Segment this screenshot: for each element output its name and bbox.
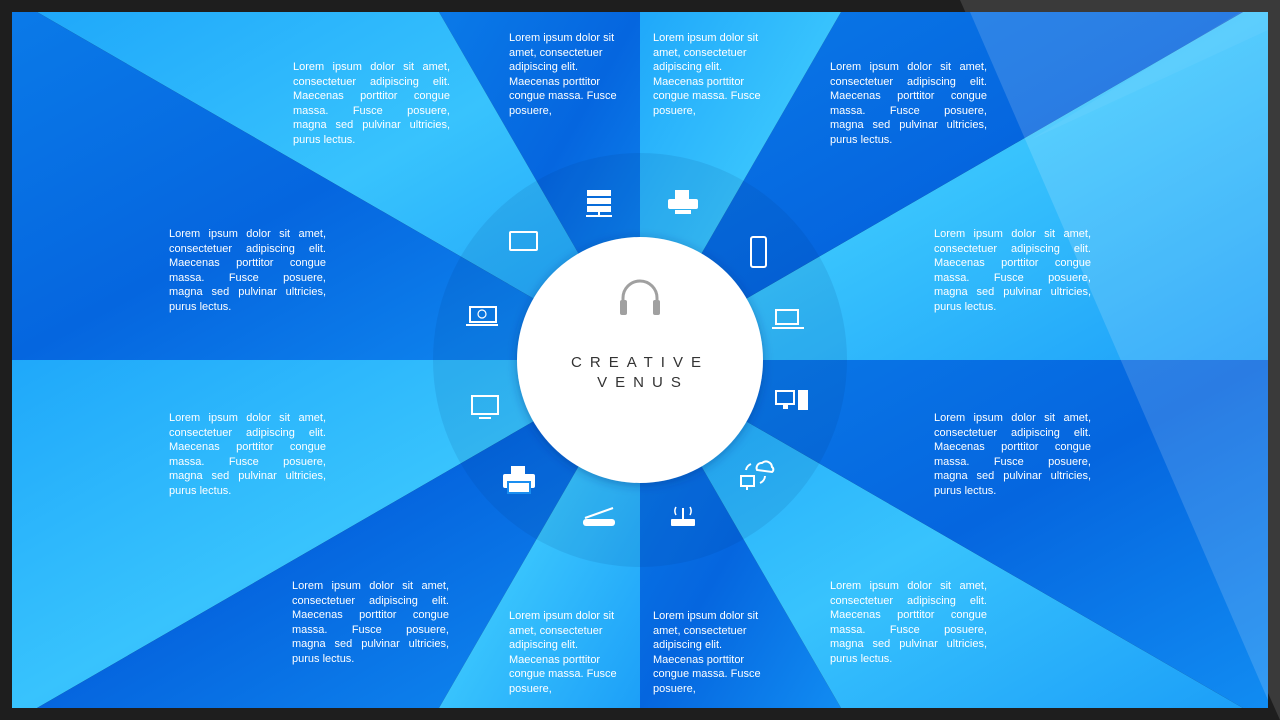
icon: headphones: [620, 281, 660, 315]
text: left lower: purus lectus.: [169, 484, 231, 496]
text: left lower: [169, 412, 326, 496]
text: left upper: consectetuer adipiscing elit.: [169, 242, 326, 254]
icon: phone: [751, 237, 766, 267]
text: right lower: consectetuer adipiscing elit.: [934, 426, 1091, 438]
text: top center-right: [653, 32, 761, 116]
text: bottom-right: Lorem ipsum dolor sit amet,: [830, 580, 987, 592]
text: bottom-left: purus lectus.: [292, 652, 354, 664]
text: left lower: massa. Fusce posuere,: [169, 456, 326, 468]
text: right upper: purus lectus.: [934, 300, 996, 312]
text: bottom-right: Maecenas porttitor congue: [830, 609, 987, 621]
text: bottom-right: [830, 580, 987, 664]
text: bottom center-right: [653, 610, 761, 694]
text: top-left outer: purus lectus.: [293, 134, 355, 146]
text: top-right outer: massa. Fusce posuere,: [830, 104, 987, 116]
text: top-right outer: Lorem ipsum dolor sit amet,: [830, 61, 987, 73]
text: top center-left: Lorem ipsum dolor sit: [509, 32, 614, 44]
text: bottom center-right: congue massa. Fusce: [653, 668, 761, 680]
text: left upper: purus lectus.: [169, 300, 231, 312]
text: bottom-left: massa. Fusce posuere,: [292, 624, 449, 636]
text: right lower: purus lectus.: [934, 484, 996, 496]
icon: laptop globe: [466, 307, 498, 325]
text: top-left outer: [293, 61, 450, 146]
text: top center-right: Lorem ipsum dolor sit: [653, 32, 758, 44]
text: top center-left: Maecenas porttitor: [509, 76, 600, 88]
icon: printer: [503, 466, 535, 493]
text: bottom center-left: amet, consectetuer: [509, 624, 603, 636]
text: top-right outer: purus lectus.: [830, 134, 892, 146]
text: bottom center-left: adipiscing elit.: [509, 639, 578, 651]
text: left lower: Lorem ipsum dolor sit amet,: [169, 412, 326, 424]
text: top-right outer: consectetuer adipiscing elit.: [830, 76, 987, 88]
top-right border corner: [960, 0, 1280, 720]
text: bottom center-right: amet, consectetuer: [653, 624, 747, 636]
icon: router: [671, 507, 695, 526]
text: right lower: massa. Fusce posuere,: [934, 456, 1091, 468]
text: top-left outer: Lorem ipsum dolor sit amet,: [293, 61, 450, 73]
text: top center-right: congue massa. Fusce: [653, 90, 761, 102]
icon: tablet: [510, 232, 537, 250]
icon: cloud sync: [741, 461, 773, 490]
text: bottom-right: magna sed pulvinar ultricies,: [830, 638, 987, 650]
text: top center-right: posuere,: [653, 104, 696, 116]
text: top center-right: adipiscing elit.: [653, 61, 722, 73]
text: right lower: Maecenas porttitor congue: [934, 441, 1091, 453]
text: bottom-left: Maecenas porttitor congue: [292, 609, 449, 621]
text: right lower: magna sed pulvinar ultricies,: [934, 470, 1091, 482]
text: left upper: massa. Fusce posuere,: [169, 272, 326, 284]
title: CREATIVE: [571, 354, 709, 371]
text: bottom-left: Lorem ipsum dolor sit amet,: [292, 580, 449, 592]
icon: desktop: [776, 390, 808, 410]
text: bottom center-left: [509, 610, 617, 694]
text: top-left outer: massa. Fusce posuere,: [293, 104, 450, 116]
text: left upper: Lorem ipsum dolor sit amet,: [169, 228, 326, 240]
text: right upper: Lorem ipsum dolor sit amet,: [934, 228, 1091, 240]
text: right upper: [934, 228, 1091, 312]
ring: [433, 153, 847, 567]
icon: server: [586, 190, 612, 217]
text: left lower: Maecenas porttitor congue: [169, 441, 326, 453]
text: bottom center-left: posuere,: [509, 682, 552, 694]
icon: laptop: [772, 310, 804, 328]
text: right upper: magna sed pulvinar ultricies,: [934, 286, 1091, 298]
icon: shredder: [668, 190, 698, 214]
text: left upper: Maecenas porttitor congue: [169, 257, 326, 269]
text: top center-left: [509, 32, 617, 116]
text: bottom-right: purus lectus.: [830, 652, 892, 664]
icon: monitor: [472, 396, 498, 418]
text: left upper: magna sed pulvinar ultricies,: [169, 286, 326, 298]
text: top center-right: amet, consectetuer: [653, 46, 747, 58]
text: top center-left: amet, consectetuer: [509, 46, 603, 58]
text: bottom-right: massa. Fusce posuere,: [830, 624, 987, 636]
text: right upper: massa. Fusce posuere,: [934, 272, 1091, 284]
text: bottom center-right: Maecenas porttitor: [653, 654, 744, 666]
text: top center-left: posuere,: [509, 104, 552, 116]
text: right lower: Lorem ipsum dolor sit amet,: [934, 412, 1091, 424]
text: left lower: magna sed pulvinar ultricies,: [169, 470, 326, 482]
text: bottom-left: [292, 580, 449, 664]
text: bottom-left: consectetuer adipiscing elit.: [292, 594, 449, 606]
text: left upper: [169, 228, 326, 312]
center circle: VENUS: [597, 374, 689, 391]
text: bottom center-right: Lorem ipsum dolor sit: [653, 610, 758, 622]
text: top center-right: Maecenas porttitor: [653, 76, 744, 88]
text: bottom center-left: Lorem ipsum dolor sit: [509, 610, 614, 622]
center circle: [517, 237, 763, 483]
text: bottom center-right: posuere,: [653, 682, 696, 694]
text: bottom center-left: Maecenas porttitor: [509, 654, 600, 666]
text: top-right outer: [830, 61, 987, 146]
text: bottom center-left: congue massa. Fusce: [509, 668, 617, 680]
text: top-right outer: magna sed pulvinar ultricies,: [830, 119, 987, 131]
icon: scanner: [583, 508, 615, 526]
text: top-left outer: consectetuer adipiscing elit.: [293, 76, 450, 88]
text: top-right outer: Maecenas porttitor congue: [830, 90, 987, 102]
text: left lower: consectetuer adipiscing elit.: [169, 426, 326, 438]
text: right upper: Maecenas porttitor congue: [934, 257, 1091, 269]
text: right upper: consectetuer adipiscing elit.: [934, 242, 1091, 254]
text: bottom-right: consectetuer adipiscing elit.: [830, 594, 987, 606]
text: top center-left: congue massa. Fusce: [509, 90, 617, 102]
text: bottom center-right: adipiscing elit.: [653, 639, 722, 651]
text: bottom-left: magna sed pulvinar ultricies,: [292, 638, 449, 650]
text: right lower: [934, 412, 1091, 496]
text: top-left outer: magna sed pulvinar ultricies,: [293, 119, 450, 131]
text: top-left outer: Maecenas porttitor congue: [293, 90, 450, 102]
text: top center-left: adipiscing elit.: [509, 61, 578, 73]
